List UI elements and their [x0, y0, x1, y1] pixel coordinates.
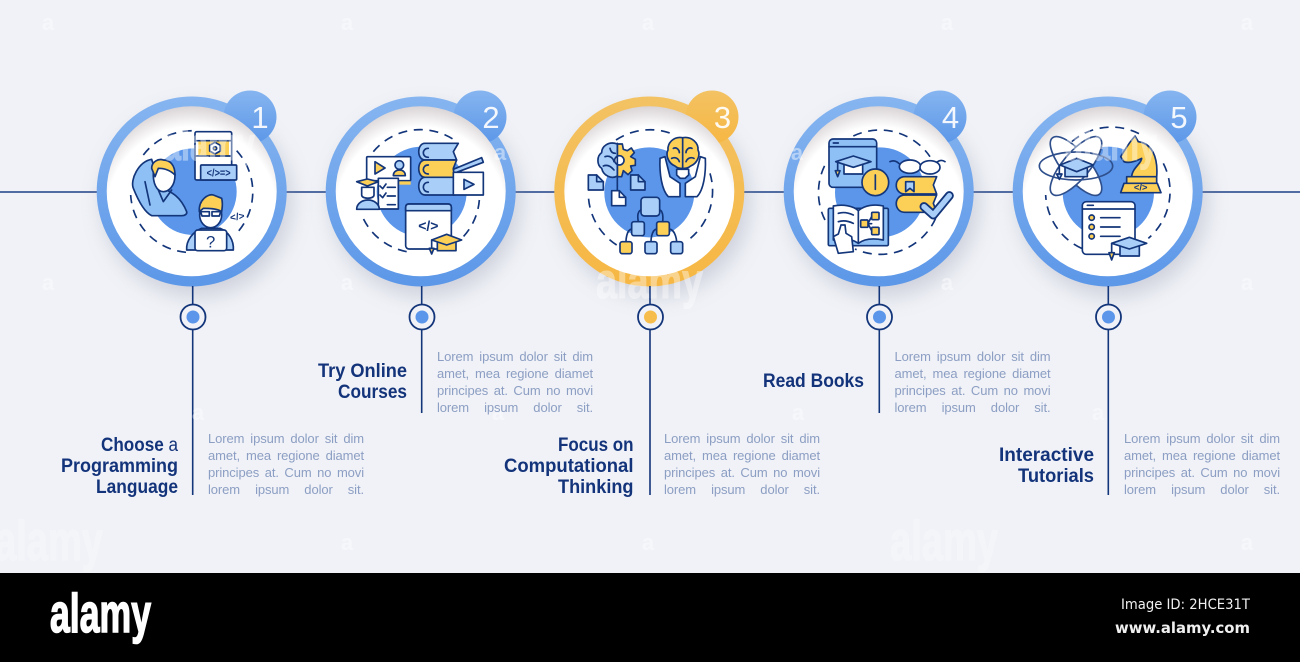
text block: step 3: lorem ipsum dolor sit.: [664, 482, 820, 497]
panel: step 3 circle: [554, 90, 749, 296]
heading: step 3: [504, 435, 634, 498]
number 2: 2: [482, 100, 500, 135]
connector: step 4: [867, 286, 892, 413]
watermarks: a: [642, 530, 655, 555]
icon: confused programmers: [131, 131, 253, 252]
watermarks: alamy: [890, 509, 998, 572]
footer image id: Image ID: 2HCE31T: [1121, 597, 1250, 613]
text block: step 5: principes at. Cum no movi: [1124, 465, 1280, 480]
connector: step 5: [1096, 286, 1121, 495]
text block: step 3: [664, 430, 820, 497]
icon: interactive tutorials: </>: [1134, 183, 1148, 193]
text block: step 3: principes at. Cum no movi: [664, 465, 820, 480]
heading: step 2: Try Online: [318, 361, 407, 382]
watermarks: a: [792, 400, 805, 425]
text block: step 4: lorem ipsum dolor sit.: [894, 400, 1050, 415]
footer logo: alamy: [50, 582, 151, 644]
watermarks: alamy: [163, 118, 255, 170]
text block: step 2: principes at. Cum no movi: [437, 383, 593, 398]
watermarks: a: [642, 10, 655, 35]
text block: step 3: amet, mea regione diamet: [664, 448, 820, 463]
heading: step 2: [318, 361, 407, 403]
text block: step 2: lorem ipsum dolor sit.: [437, 400, 593, 415]
icon: computational thinking: [588, 130, 713, 254]
text block: step 3: Lorem ipsum dolor sit dim: [664, 430, 820, 446]
watermarks: a: [494, 140, 507, 165]
text block: step 1: [208, 430, 364, 497]
connector: step 1: [180, 286, 206, 495]
connector: step 2: [410, 286, 434, 413]
number 1: 1: [251, 100, 269, 135]
text block: step 4: amet, mea regione diamet: [894, 366, 1050, 381]
text block: step 5: [1124, 430, 1280, 497]
heading: step 5: Tutorials: [1018, 466, 1094, 487]
watermarks: a: [1092, 400, 1105, 425]
text block: step 5: amet, mea regione diamet: [1124, 448, 1280, 463]
text block: step 5: lorem ipsum dolor sit.: [1124, 482, 1280, 497]
watermarks: a: [1241, 10, 1254, 35]
heading: step 3: Focus on: [558, 435, 634, 456]
watermarks: a: [492, 400, 505, 425]
icon: online courses: </>: [418, 218, 438, 234]
heading: step 4: Read Books: [763, 371, 864, 392]
number 5: 5: [1170, 100, 1188, 135]
connector: step 3: [638, 286, 663, 495]
text block: step 1: lorem ipsum dolor sit.: [208, 482, 364, 497]
watermarks: a: [791, 140, 804, 165]
watermarks: a: [341, 270, 354, 295]
icon: confused programmers: </>: [229, 211, 245, 224]
footer url: www.alamy.com: [1115, 619, 1250, 637]
watermarks: alamy: [596, 253, 703, 309]
text block: step 4: principes at. Cum no movi: [894, 383, 1050, 398]
watermarks: a: [341, 10, 354, 35]
icon: interactive tutorials: [1039, 127, 1170, 260]
text block: step 2: Lorem ipsum dolor sit dim: [437, 348, 593, 364]
horizontal timeline: [0, 191, 1300, 193]
panel: step 1 circle: [97, 90, 291, 296]
text block: step 2: amet, mea regione diamet: [437, 366, 593, 381]
watermarks: a: [1241, 270, 1254, 295]
panel: step 4 circle: [784, 90, 978, 296]
text block: step 4: Lorem ipsum dolor sit dim: [894, 348, 1050, 364]
text block: step 5: Lorem ipsum dolor sit dim: [1124, 430, 1280, 446]
icon: online courses: [357, 130, 483, 254]
watermarks: a: [42, 10, 55, 35]
heading: step 5: [999, 445, 1094, 487]
icon: reading books: [818, 130, 949, 254]
watermarks: a: [941, 10, 954, 35]
text block: step 1: amet, mea regione diamet: [208, 448, 364, 463]
watermarks: a: [192, 400, 205, 425]
text block: step 1: principes at. Cum no movi: [208, 465, 364, 480]
text block: step 1: Lorem ipsum dolor sit dim: [208, 430, 364, 446]
heading: step 5: Interactive: [999, 445, 1094, 466]
heading: step 1: Choose a: [101, 435, 178, 456]
text block: step 2: [437, 348, 593, 415]
footer bar: [0, 573, 1300, 662]
watermarks: a: [341, 530, 354, 555]
heading: step 3: Computational: [504, 456, 634, 477]
panel: step 5 circle: [1013, 90, 1207, 296]
heading: step 1: Programming: [61, 456, 178, 477]
watermarks: a: [1241, 530, 1254, 555]
number 3: 3: [714, 100, 731, 135]
number 4: 4: [942, 100, 959, 135]
watermarks: a: [941, 270, 954, 295]
heading: step 1: [61, 435, 178, 498]
icon: confused programmers: ?: [206, 232, 215, 251]
text block: step 4: [894, 348, 1050, 415]
icon: confused programmers: </>=>: [207, 167, 231, 179]
heading: step 3: Thinking: [558, 477, 634, 498]
heading: step 2: Courses: [338, 382, 407, 403]
watermarks: alamy: [1065, 118, 1157, 170]
watermarks: a: [42, 270, 55, 295]
panel: step 2 circle: [326, 90, 520, 296]
heading: step 1: Language: [96, 477, 178, 498]
